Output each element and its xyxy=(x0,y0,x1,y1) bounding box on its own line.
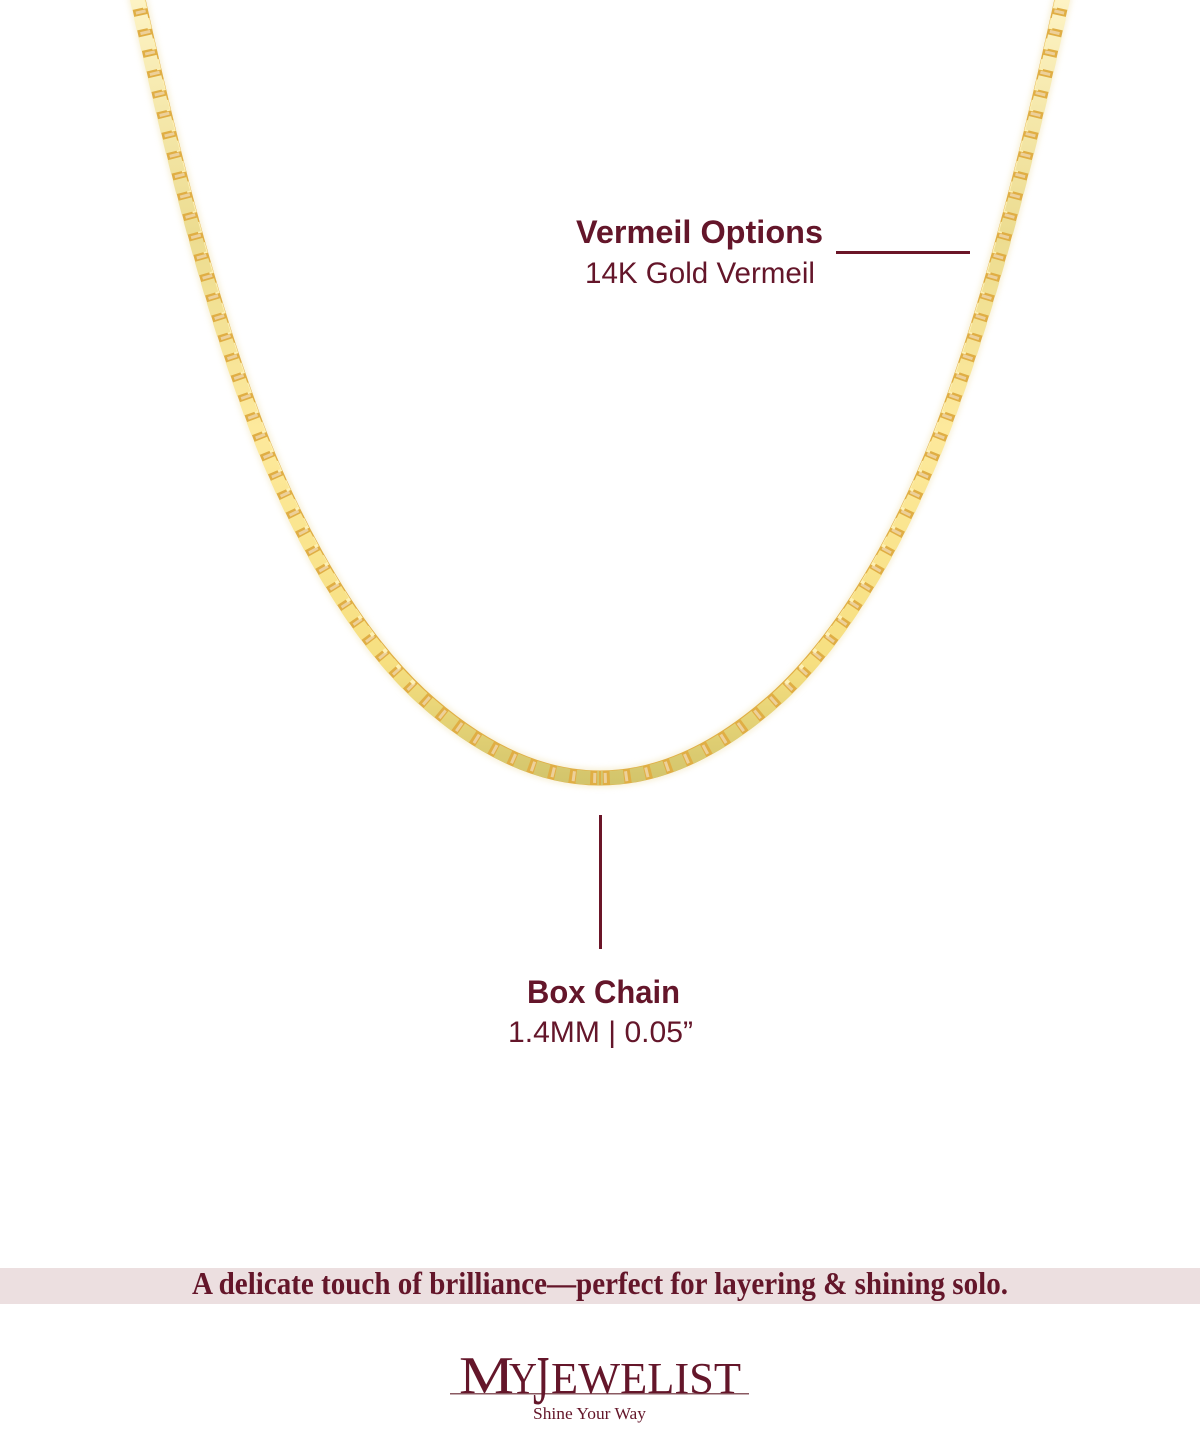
logo: MyJewelist: Shine Your Way xyxy=(533,1404,647,1423)
text: dimensions: 1.4MM | 0.05” xyxy=(508,1016,693,1049)
logo: MyJewelist: J xyxy=(533,1343,549,1420)
text: 14K Gold Vermeil: 14K Gold Vermeil xyxy=(585,257,815,290)
callout: vermeil options xyxy=(576,214,970,290)
tagline band xyxy=(0,1265,1200,1304)
heading: Vermeil Options: Vermeil Options xyxy=(576,214,823,250)
logo: MyJewelist: Y xyxy=(509,1354,537,1403)
logo: MyJewelist: EWELIST xyxy=(551,1354,741,1403)
logo: MyJewelist: M xyxy=(459,1347,514,1405)
callout: box chain xyxy=(508,815,693,1049)
tagline band: A delicate touch of brilliance—perfect for layering & shining solo. xyxy=(192,1265,1008,1301)
logo: MyJewelist xyxy=(450,1343,749,1423)
leader line to chain xyxy=(836,251,970,254)
heading: Box Chain: Box Chain xyxy=(527,974,680,1010)
necklace: gold box chain xyxy=(136,0,1064,778)
leader line to chain xyxy=(599,815,602,949)
